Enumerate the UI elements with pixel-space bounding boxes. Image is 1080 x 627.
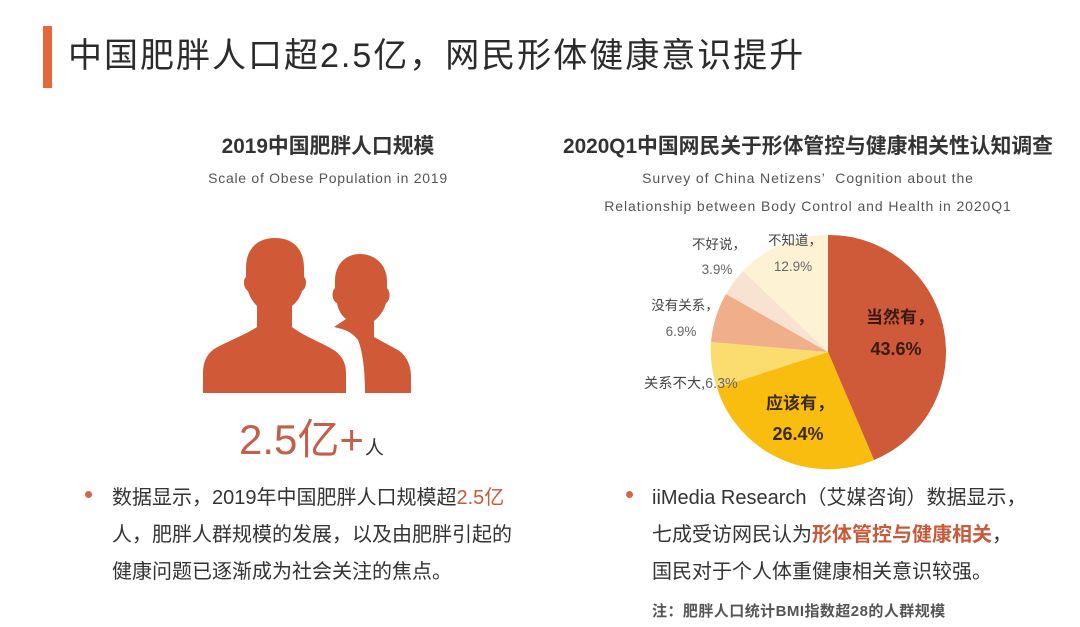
footnote: 注：肥胖人口统计BMI指数超28的人群规模 [652, 603, 946, 620]
label: 不好说: 不好说， [692, 237, 746, 252]
big number: 2.5亿+人: 2.5亿+人 [239, 416, 384, 463]
slice: 当然有 43.6% [828, 235, 946, 460]
label: 没有关系: 没有关系， [651, 298, 719, 313]
label: 当然有: 43.6% [870, 339, 922, 359]
label: 没有关系 [651, 298, 719, 339]
label: 不好说 [692, 237, 746, 277]
label: 不知道: 12.9% [774, 259, 812, 274]
slice: 关系不大 6.3% [711, 342, 828, 388]
left panel heading: 2019中国肥胖人口规模 [222, 135, 434, 158]
label: 不知道 [768, 232, 822, 274]
right bullet [626, 491, 633, 498]
right panel subtitle: Survey of China Netizens’ Cognition about the [642, 170, 974, 186]
right panel subtitle [604, 170, 1012, 214]
slice: 没有关系 6.9% [711, 294, 828, 352]
right paragraph: 七成受访网民认为形体管控与健康相关， [652, 524, 1012, 546]
title: 中国肥胖人口超2.5亿，网民形体健康意识提升 [68, 37, 805, 75]
left paragraph: 人，肥胖人群规模的发展，以及由肥胖引起的 [112, 524, 512, 546]
left bullet [85, 491, 92, 498]
left paragraph: 健康问题已逐渐成为社会关注的焦点。 [112, 561, 452, 583]
slice: 不好说 3.9% [726, 271, 828, 352]
left paragraph [112, 487, 512, 583]
label: 不好说: 3.9% [702, 262, 732, 277]
left panel subtitle: Scale of Obese Population in 2019 [208, 170, 448, 186]
right panel subtitle: Relationship between Body Control and Health in 2020Q1 [604, 198, 1012, 214]
title accent bar [43, 26, 52, 88]
pie chart [644, 232, 946, 470]
label: 应该有: 应该有， [766, 393, 834, 413]
right paragraph: 国民对于个人体重健康相关意识较强。 [652, 561, 992, 583]
label: 当然有: 当然有， [866, 307, 934, 327]
label: 不知道: 不知道， [768, 232, 822, 248]
label: 应该有: 26.4% [772, 424, 824, 444]
left paragraph: 数据显示，2019年中国肥胖人口规模超2.5亿 [112, 487, 504, 509]
icon: two person silhouettes [203, 238, 411, 393]
label: 关系不大: 关系不大,6.3% [644, 375, 738, 392]
label: 当然有 [866, 307, 934, 359]
right panel heading: 2020Q1中国网民关于形体管控与健康相关性认知调查 [563, 135, 1053, 158]
label: 没有关系: 6.9% [666, 324, 696, 339]
right paragraph: iiMedia Research（艾媒咨询）数据显示， [652, 487, 1027, 509]
label: 应该有 [766, 393, 834, 444]
slice: 应该有 26.4% [717, 352, 874, 469]
right paragraph [652, 487, 1027, 583]
slice: 不知道 12.9% [743, 235, 828, 352]
